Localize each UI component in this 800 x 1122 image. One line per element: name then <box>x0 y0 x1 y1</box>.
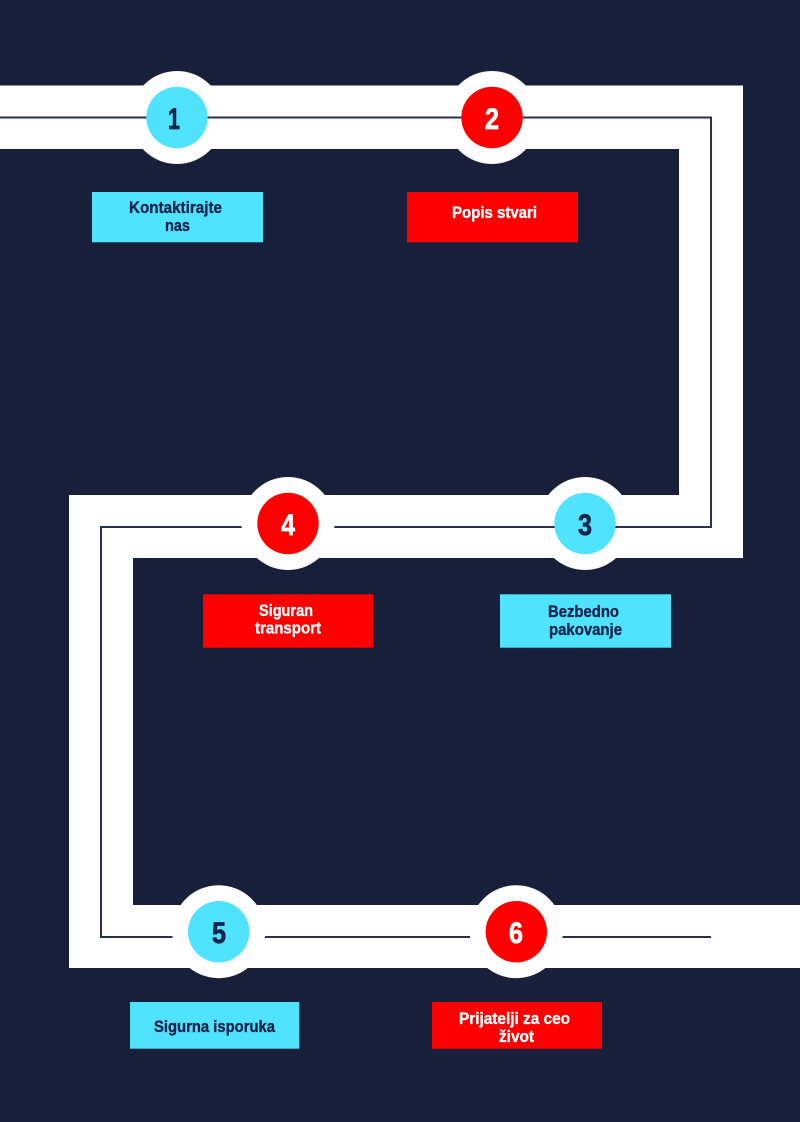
step 5 marker <box>172 885 265 978</box>
thin centre route line <box>0 118 711 937</box>
step 1 <box>92 71 263 242</box>
step 3 label: Bezbedno <box>548 602 619 621</box>
step 5 <box>130 885 299 1049</box>
step 3 marker <box>538 477 632 570</box>
step 4 marker <box>242 477 334 570</box>
step 2 marker: 2 <box>485 103 499 136</box>
step 4 <box>203 477 373 648</box>
step 3 marker: 3 <box>578 509 592 542</box>
step 2 <box>407 71 578 242</box>
step 1 marker <box>130 71 224 164</box>
step 6 label <box>432 1002 602 1049</box>
step 6 marker <box>470 885 563 978</box>
step 4 label: transport <box>255 618 321 638</box>
step 4 label: Siguran <box>259 601 313 620</box>
white winding road <box>0 86 800 968</box>
step 1 label <box>92 192 263 242</box>
step 3 <box>500 477 671 648</box>
step 4 label <box>203 594 373 648</box>
step 1 label: nas <box>165 216 190 235</box>
step 3 label: pakovanje <box>549 620 622 639</box>
step 1 marker: 1 <box>168 103 180 136</box>
step 5 marker: 5 <box>212 917 226 950</box>
step 6 label: Prijatelji za ceo <box>459 1009 570 1028</box>
step 5 label <box>130 1002 299 1049</box>
step 2 label <box>407 192 578 242</box>
step 5 label: Sigurna isporuka <box>154 1017 275 1036</box>
step 1 label: Kontaktirajte <box>129 198 222 217</box>
step 4 marker: 4 <box>281 509 295 542</box>
step 2 marker <box>445 71 539 164</box>
step 6 label: život <box>499 1027 534 1046</box>
step 2 label: Popis stvari <box>452 203 537 222</box>
step 6 marker: 6 <box>509 917 523 950</box>
step 6 <box>432 885 602 1049</box>
step 3 label <box>500 594 671 648</box>
